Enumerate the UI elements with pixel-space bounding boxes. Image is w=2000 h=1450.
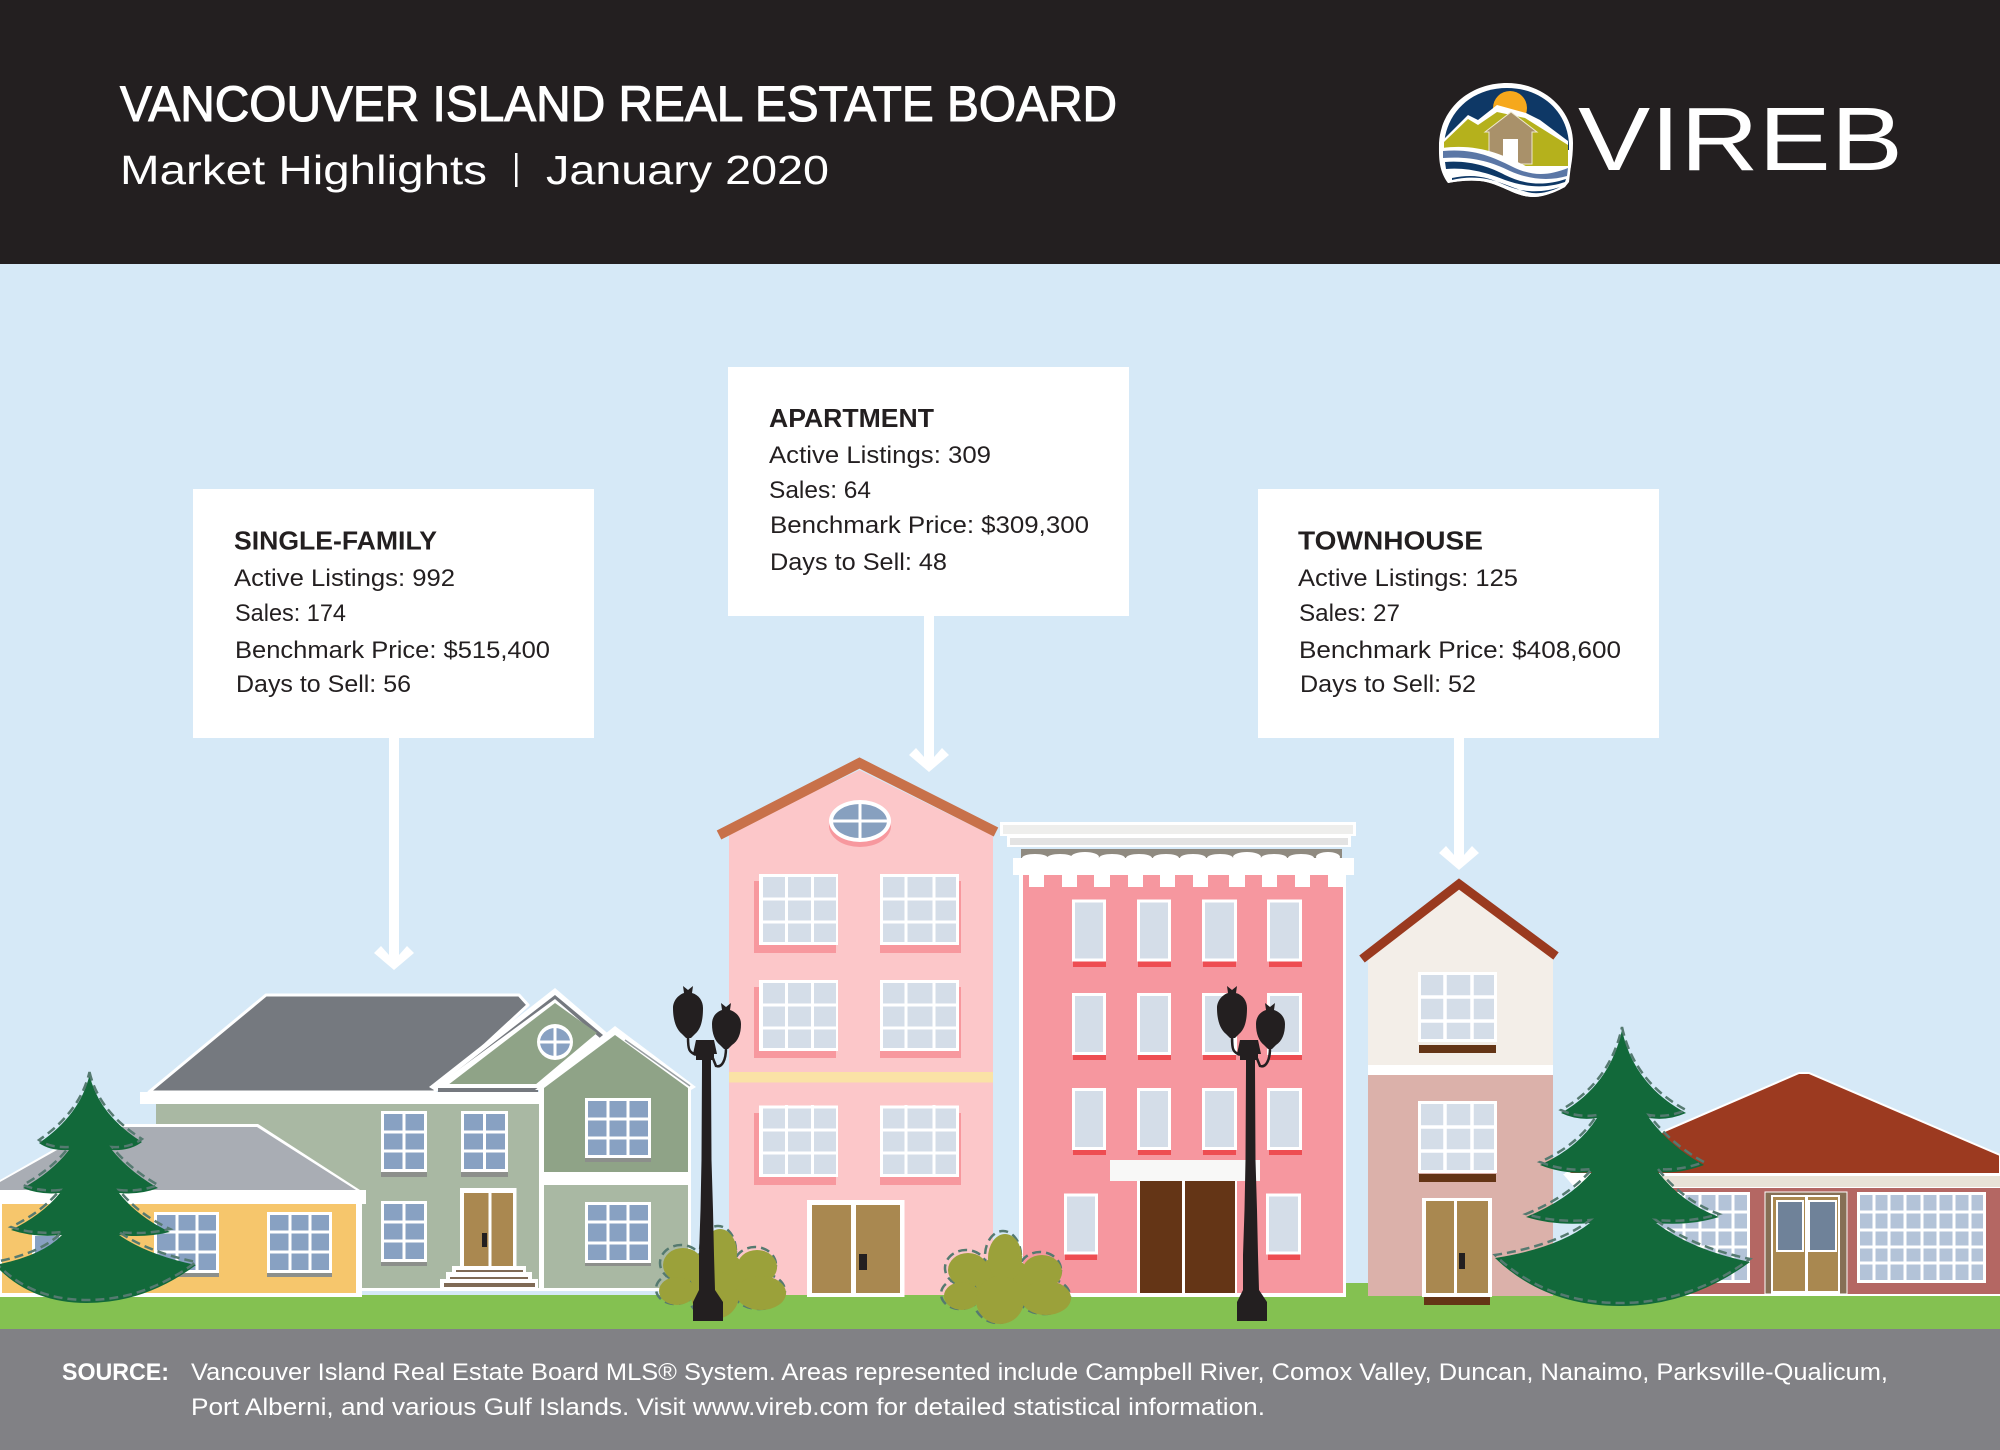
street lamp: right (1217, 986, 1285, 1321)
arrow: apartment (909, 616, 949, 772)
stats (1298, 565, 1621, 698)
main roof (149, 995, 528, 1092)
heading: SINGLE-FAMILY (234, 526, 437, 556)
street lamp: left (673, 986, 741, 1321)
logo: VIREB emblem (1439, 83, 1573, 197)
gable (429, 988, 612, 1092)
building: bungalow (1563, 1073, 2000, 1296)
right wing (535, 1026, 696, 1291)
windows (1065, 901, 1302, 1260)
roof (719, 763, 996, 835)
stats: Days to Sell: 56 (236, 671, 411, 698)
sky background (0, 264, 2000, 1330)
tree: right (1495, 1027, 1750, 1306)
stats: Benchmark Price: $309,300 (770, 512, 1089, 539)
stats: Active Listings: 125 (1298, 565, 1518, 592)
front door and steps (440, 1188, 538, 1288)
door (1765, 1192, 1847, 1294)
building: townhouse (1362, 884, 1556, 1305)
subtitle: Market Highlights (120, 147, 487, 193)
bush: left (656, 1226, 786, 1319)
door (1422, 1198, 1492, 1305)
windows (381, 1098, 651, 1266)
window (1640, 1192, 1750, 1283)
source text: Port Alberni, and various Gulf Islands. Visit www.vireb.com for detailed statistical information. (191, 1394, 1265, 1421)
panel: single-family (193, 489, 594, 738)
stats (234, 565, 550, 698)
subtitle (120, 147, 829, 193)
ground: grass (0, 1283, 2000, 1330)
windows (34, 1212, 332, 1277)
title: VANCOUVER ISLAND REAL ESTATE BOARD (120, 76, 1117, 132)
yellow side wing (0, 1124, 366, 1297)
stats: Active Listings: 309 (769, 442, 991, 469)
arrow: townhouse (1439, 738, 1479, 870)
building: pink apartment (719, 763, 996, 1297)
subtitle: January 2020 (546, 147, 829, 193)
panel: apartment (728, 367, 1129, 616)
wall (156, 1104, 539, 1288)
stats: Benchmark Price: $408,600 (1299, 637, 1621, 664)
logo wordmark: VIREB (1578, 90, 1903, 190)
oval window (829, 800, 891, 847)
building: red apartment (1000, 822, 1356, 1297)
footer band (0, 1329, 2000, 1450)
roof (1362, 884, 1556, 959)
tree: left (0, 1072, 196, 1303)
cornice (1000, 822, 1356, 887)
bush: centre (941, 1231, 1071, 1324)
source label: SOURCE: (62, 1359, 169, 1386)
stats: Sales: 174 (235, 600, 346, 627)
heading: TOWNHOUSE (1298, 526, 1483, 556)
door (807, 1200, 904, 1297)
stats (769, 442, 1089, 576)
stats: Days to Sell: 48 (770, 549, 947, 576)
panel: townhouse (1258, 489, 1659, 738)
heading: APARTMENT (769, 403, 934, 433)
window grid (754, 874, 961, 1185)
stats: Benchmark Price: $515,400 (235, 637, 550, 664)
window (1418, 1101, 1497, 1182)
window (1418, 972, 1497, 1053)
window (1857, 1192, 1986, 1283)
stats: Active Listings: 992 (234, 565, 455, 592)
stats: Sales: 27 (1299, 600, 1400, 627)
stats: Sales: 64 (769, 477, 871, 504)
header band (0, 0, 2000, 264)
band (729, 1072, 993, 1082)
building: single-family house (0, 988, 696, 1297)
source text (191, 1359, 1888, 1421)
source text: Vancouver Island Real Estate Board MLS® System. Areas represented include Campbell River, Comox Valley, Duncan, Nanaimo, Parksville-Qualicum, (191, 1359, 1888, 1386)
stats: Days to Sell: 52 (1300, 671, 1476, 698)
arrow: single-family (374, 738, 414, 970)
awning and door (1110, 1160, 1260, 1295)
